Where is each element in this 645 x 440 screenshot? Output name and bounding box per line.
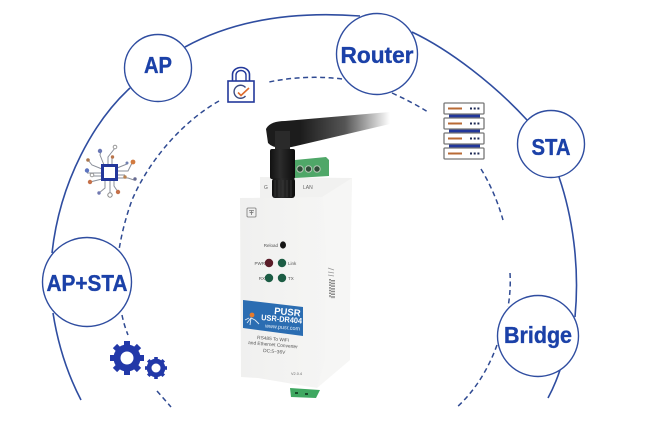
PWR LED xyxy=(254,259,273,267)
RX LED xyxy=(259,274,273,282)
mode node: AP: AP xyxy=(144,52,172,78)
printed description: DC:5~36V xyxy=(263,348,286,356)
RX LED: RX xyxy=(259,276,265,281)
TX LED xyxy=(278,274,294,282)
icon: circuit chip xyxy=(85,145,137,197)
icon: padlock with check xyxy=(228,68,254,102)
mode node: STA xyxy=(518,110,584,178)
green terminal block xyxy=(295,157,329,178)
side of housing xyxy=(317,178,352,388)
icon: large gear xyxy=(110,341,144,375)
mode node: Bridge xyxy=(498,296,578,376)
blue product label: www.pusr.com xyxy=(264,323,301,333)
mode node: Bridge: Bridge xyxy=(504,322,572,348)
TX LED: TX xyxy=(288,276,294,281)
mode node: Router xyxy=(336,14,418,94)
printed description: RS485 To WiFi xyxy=(257,335,289,344)
antenna symbol xyxy=(247,208,256,217)
icon: server stack xyxy=(444,103,484,159)
blue product label: USR-DR404 xyxy=(261,313,303,326)
reload button: Reload xyxy=(264,243,278,248)
blue product label xyxy=(243,300,303,336)
rear housing xyxy=(260,177,352,215)
outer solid ring xyxy=(52,15,577,400)
QR sticker xyxy=(328,268,334,299)
version mark: V2.0.4 xyxy=(291,372,302,376)
front panel xyxy=(240,197,326,388)
rear port labels: G xyxy=(264,185,268,191)
blue product label: PUSR xyxy=(274,306,301,319)
printed description: and Ethernet Converter xyxy=(248,340,298,350)
inner dashed ring xyxy=(119,77,510,408)
bottom green connector xyxy=(290,388,320,398)
PWR LED: PWR xyxy=(254,261,266,266)
reload button xyxy=(264,241,286,249)
mode node: Router: Router xyxy=(340,42,414,68)
printed description xyxy=(248,335,298,356)
mode node: AP xyxy=(124,34,192,102)
Link LED: Link xyxy=(288,261,297,266)
antenna rod xyxy=(266,112,390,148)
device: USR-DR404 converter xyxy=(240,112,390,398)
icon: small gear xyxy=(145,357,167,379)
mode node: AP+STA xyxy=(42,238,132,326)
mode node: AP+STA: AP+STA xyxy=(46,270,128,296)
antenna connector xyxy=(270,131,295,198)
mode node: STA: STA xyxy=(532,134,570,160)
LAN label: LAN xyxy=(303,185,313,191)
Link LED xyxy=(278,259,297,267)
